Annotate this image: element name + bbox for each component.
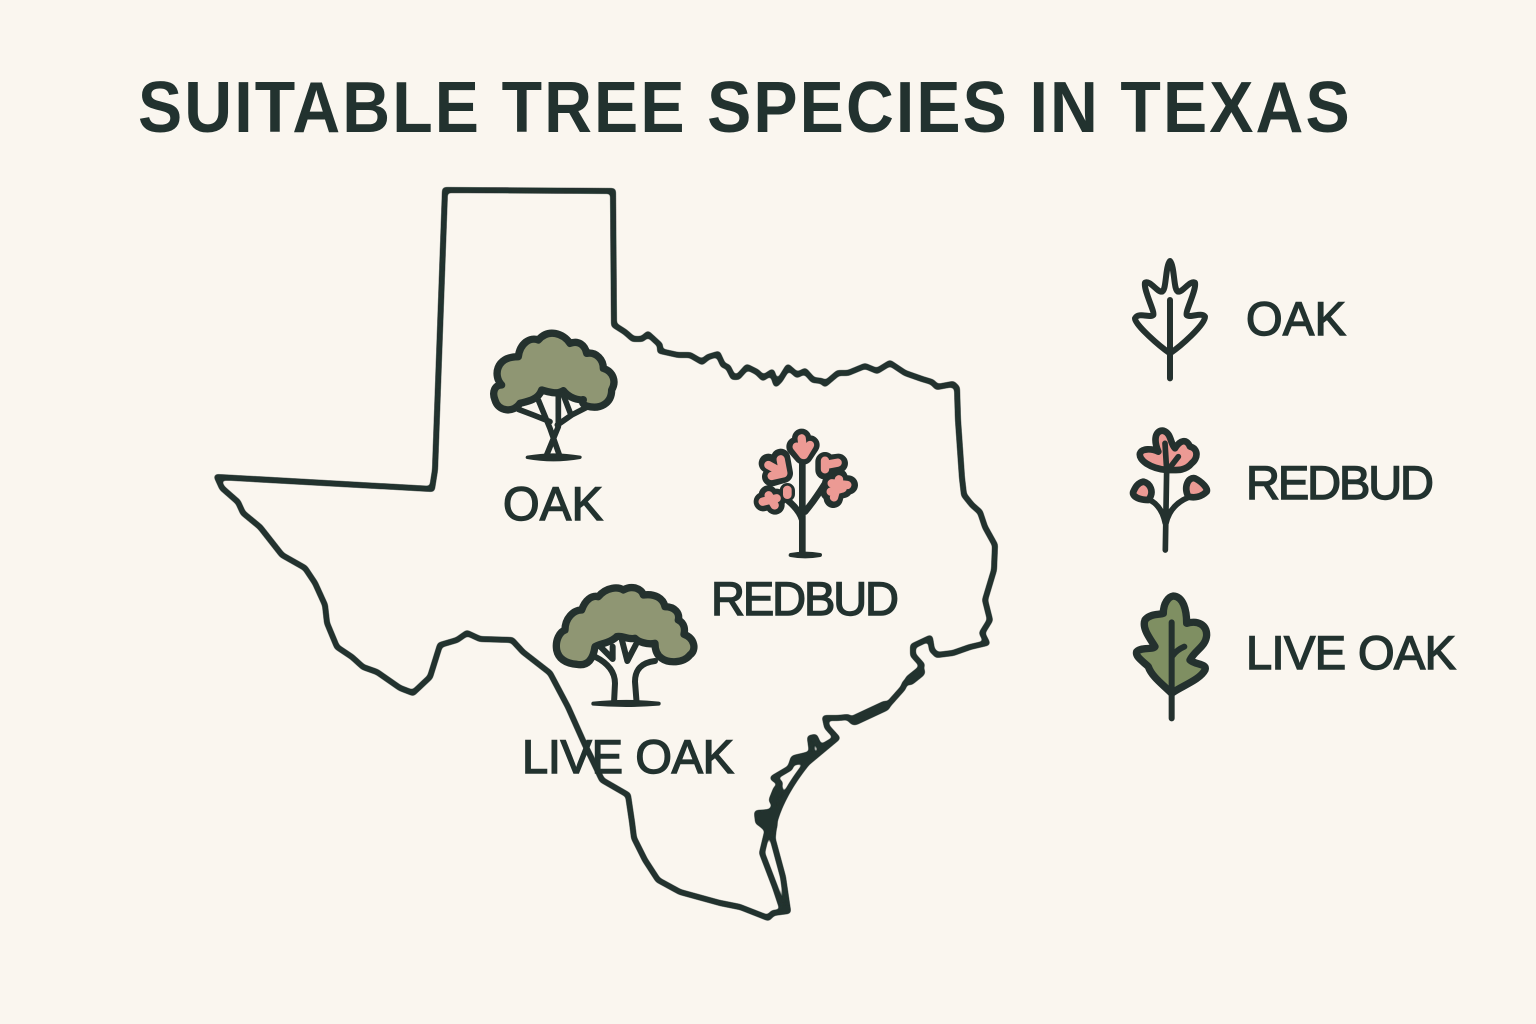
icon: live oak leaf xyxy=(1136,596,1207,718)
tree: redbud on map xyxy=(763,438,848,556)
icon: redbud sprig xyxy=(1133,431,1207,550)
tree: live oak on map xyxy=(556,588,694,705)
legend: live oak xyxy=(1136,596,1456,718)
label: oak on map: OAK xyxy=(503,477,603,530)
title: SUITABLE TREE SPECIES IN TEXAS xyxy=(138,66,1350,148)
label: redbud on map: REDBUD xyxy=(711,572,899,625)
map: Texas outline xyxy=(217,190,995,918)
icon: oak leaf xyxy=(1135,261,1205,378)
label: live oak on map: LIVE OAK xyxy=(522,730,734,783)
legend: oak xyxy=(1135,261,1346,378)
legend label: redbud: REDBUD xyxy=(1246,456,1434,509)
legend label: live oak: LIVE OAK xyxy=(1246,626,1456,679)
legend: redbud xyxy=(1133,431,1434,550)
tree: oak on map xyxy=(494,333,614,460)
legend label: oak: OAK xyxy=(1246,292,1346,345)
